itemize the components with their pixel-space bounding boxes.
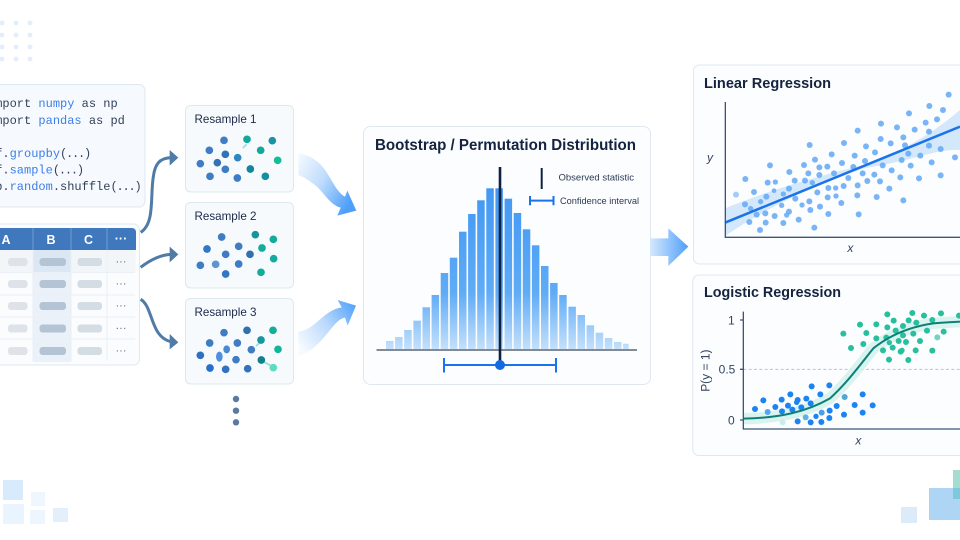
heading: logistic regression: Logistic Regression xyxy=(704,284,841,301)
table rows: ··· xyxy=(116,278,126,290)
arrow: table to resample 3 xyxy=(141,299,178,349)
logistic curve xyxy=(743,322,960,419)
class 1 points xyxy=(840,310,960,363)
heading: resample 1: Resample 1 xyxy=(194,112,257,126)
table rows: ··· xyxy=(116,256,126,268)
arrow: upper resamples to distribution xyxy=(298,153,356,216)
tick labels xyxy=(719,313,736,427)
observed statistic line xyxy=(499,167,501,365)
heading: resample 2: Resample 2 xyxy=(194,209,257,223)
panel: logistic regression xyxy=(693,275,960,456)
arrow: table to resample 2 xyxy=(141,247,178,267)
arrow: distribution to regressions xyxy=(650,228,688,266)
panel: data table xyxy=(0,224,140,365)
threshold line xyxy=(743,368,960,371)
tick labels: 0.5 xyxy=(719,363,736,377)
x axis label: x xyxy=(846,241,854,255)
scatter chart: linear xyxy=(706,92,960,255)
confidence interval marker xyxy=(444,358,556,372)
axes xyxy=(725,102,960,237)
dots: resample 3 xyxy=(196,326,282,373)
panel: distribution xyxy=(364,126,650,384)
regression line xyxy=(725,127,960,223)
data points xyxy=(733,92,958,233)
dots: resample 1 xyxy=(196,135,281,182)
histogram axis xyxy=(376,349,637,351)
panel: resample 2 xyxy=(186,202,294,288)
table header xyxy=(0,228,136,250)
panel: linear regression xyxy=(694,65,960,264)
histogram bars xyxy=(386,188,629,349)
heading: distribution: Bootstrap / Permutation Distribution xyxy=(375,137,636,154)
x axis label: x xyxy=(854,434,862,448)
table rows: ··· xyxy=(116,345,126,357)
legend: observed statistic xyxy=(542,168,634,189)
table header: C xyxy=(84,233,93,247)
heading: resample 3: Resample 3 xyxy=(194,305,257,319)
table rows: ··· xyxy=(116,300,126,312)
tick labels: 0 xyxy=(728,413,735,427)
icon: vertical ellipsis xyxy=(233,396,239,425)
code text xyxy=(0,97,140,194)
panel: code snippet xyxy=(0,84,145,207)
arrow: table to resample 1 xyxy=(141,150,178,232)
legend: confidence interval: Confidence interval xyxy=(560,196,639,207)
legend: observed statistic: Observed statistic xyxy=(558,172,634,184)
y axis label: P(y = 1) xyxy=(699,350,713,392)
y axis label: y xyxy=(706,151,714,165)
table header: A xyxy=(1,233,11,247)
confidence band xyxy=(725,110,960,236)
scatter chart: logistic xyxy=(699,310,960,448)
table header: ··· xyxy=(115,232,127,246)
decoration: top-left dot grid xyxy=(0,21,32,61)
table rows: ··· xyxy=(116,322,126,334)
decoration: bottom-right squares xyxy=(901,470,960,523)
class 0 points xyxy=(752,382,876,425)
panel: resample 1 xyxy=(186,106,294,192)
panel: resample 3 xyxy=(186,298,294,384)
dots: resample 2 xyxy=(196,231,277,278)
arrow: lower resample to distribution xyxy=(298,300,356,357)
curve band xyxy=(743,322,960,419)
table rows xyxy=(0,250,136,362)
table header: B xyxy=(46,233,56,247)
heading: linear regression: Linear Regression xyxy=(704,75,831,92)
axes and ticks xyxy=(740,312,960,429)
tick labels: 1 xyxy=(728,313,735,327)
decoration: bottom-left squares xyxy=(3,480,68,524)
